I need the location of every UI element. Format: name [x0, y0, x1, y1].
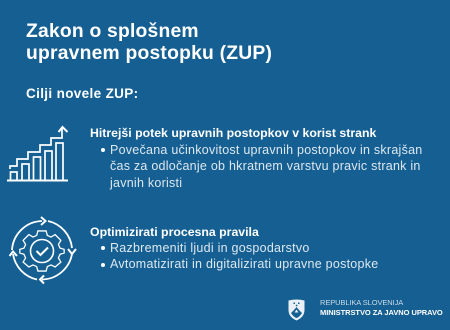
logo text: [320, 298, 443, 316]
bullet list: goal 2: Razbremeniti ljudi in gospodarstvo: [110, 241, 310, 255]
bullet list: goal 1: javnih koristi: [110, 176, 182, 190]
icon: gear with check mark and cycle arrows: [8, 216, 77, 284]
title: Zakon o splošnem: [26, 21, 199, 42]
icon: rising bar chart: [7, 126, 68, 182]
bullet list: goal 2: [101, 241, 378, 271]
logo text: MINISTRSTVO ZA JAVNO UPRAVO: [320, 308, 443, 316]
heading: goal 1: Hitrejši potek upravnih postopkov v korist strank: [90, 126, 376, 140]
bullet list: goal 1: čas za odločanje ob hkratnem varstvu pravic strank in: [110, 159, 421, 173]
logo text: REPUBLIKA SLOVENIJA: [320, 298, 403, 307]
title: upravnem postopku (ZUP): [26, 42, 272, 64]
icon: coat of arms shield: [288, 300, 304, 320]
subheading: Cilji novele ZUP:: [26, 86, 138, 100]
heading: goal 2: Optimizirati procesna pravila: [90, 224, 259, 238]
title: [26, 21, 272, 64]
bullet list: goal 2: Avtomatizirati in digitalizirati upravne postopke: [110, 257, 378, 271]
bullet list: goal 1: Povečana učinkovitost upravnih postopkov in skrajšan: [110, 142, 422, 156]
bullet list: goal 1: [101, 142, 422, 190]
